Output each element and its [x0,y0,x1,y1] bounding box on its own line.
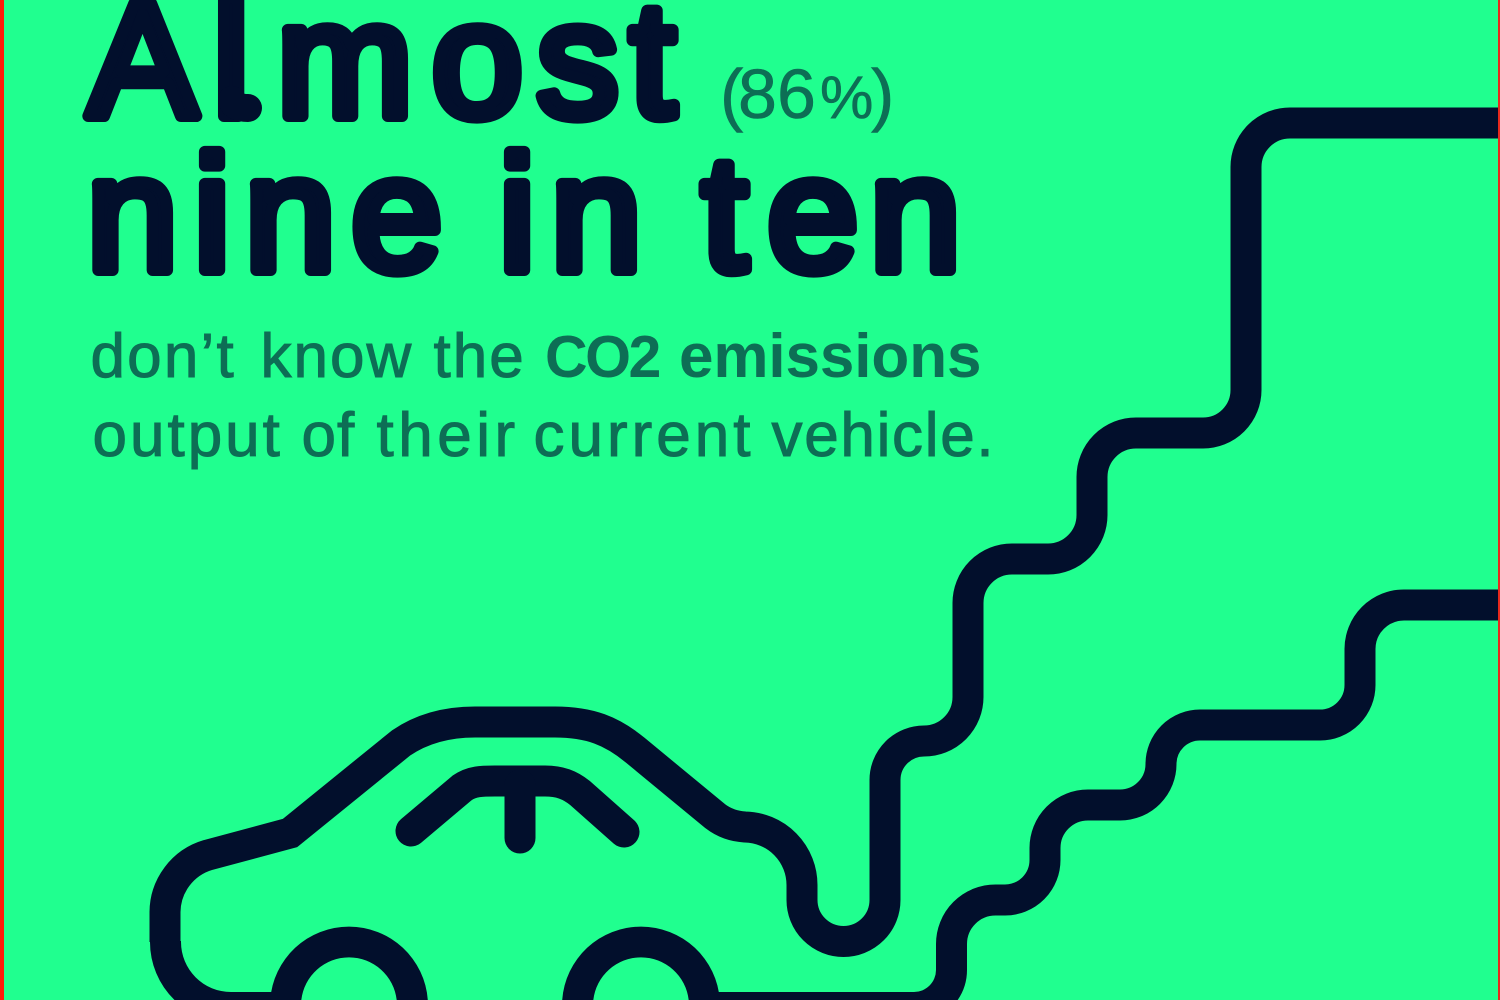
rear wheel arch [270,927,428,1000]
headline: nine in ten: in [499,122,642,305]
front wheel arch [562,927,720,1000]
window pillar [504,785,536,838]
upper exhaust line and car body [165,123,1498,942]
subtext line one: emissions [679,322,981,391]
bottom corner of lower exhaust line [700,969,967,1000]
headline: nine in ten: ten [702,122,961,305]
front corner of car body [150,941,290,1000]
subtext line two: of [302,401,355,470]
subtext line one: CO2 [545,324,660,390]
subtext line two: output [92,401,283,470]
car window [411,781,624,832]
subtext line two: current [534,401,754,470]
headline: nine in ten: nine [87,122,442,305]
subtext line two: their [376,401,520,470]
illustration: car with exhaust trails [150,123,1498,1000]
percentage note: (86%) [720,55,894,133]
subtext line one: the [434,322,526,391]
subtext line one: know [260,322,413,391]
lower exhaust line [952,605,1498,970]
subtext line one: don’t [90,322,236,391]
subtext line two: vehicle. [772,401,995,470]
